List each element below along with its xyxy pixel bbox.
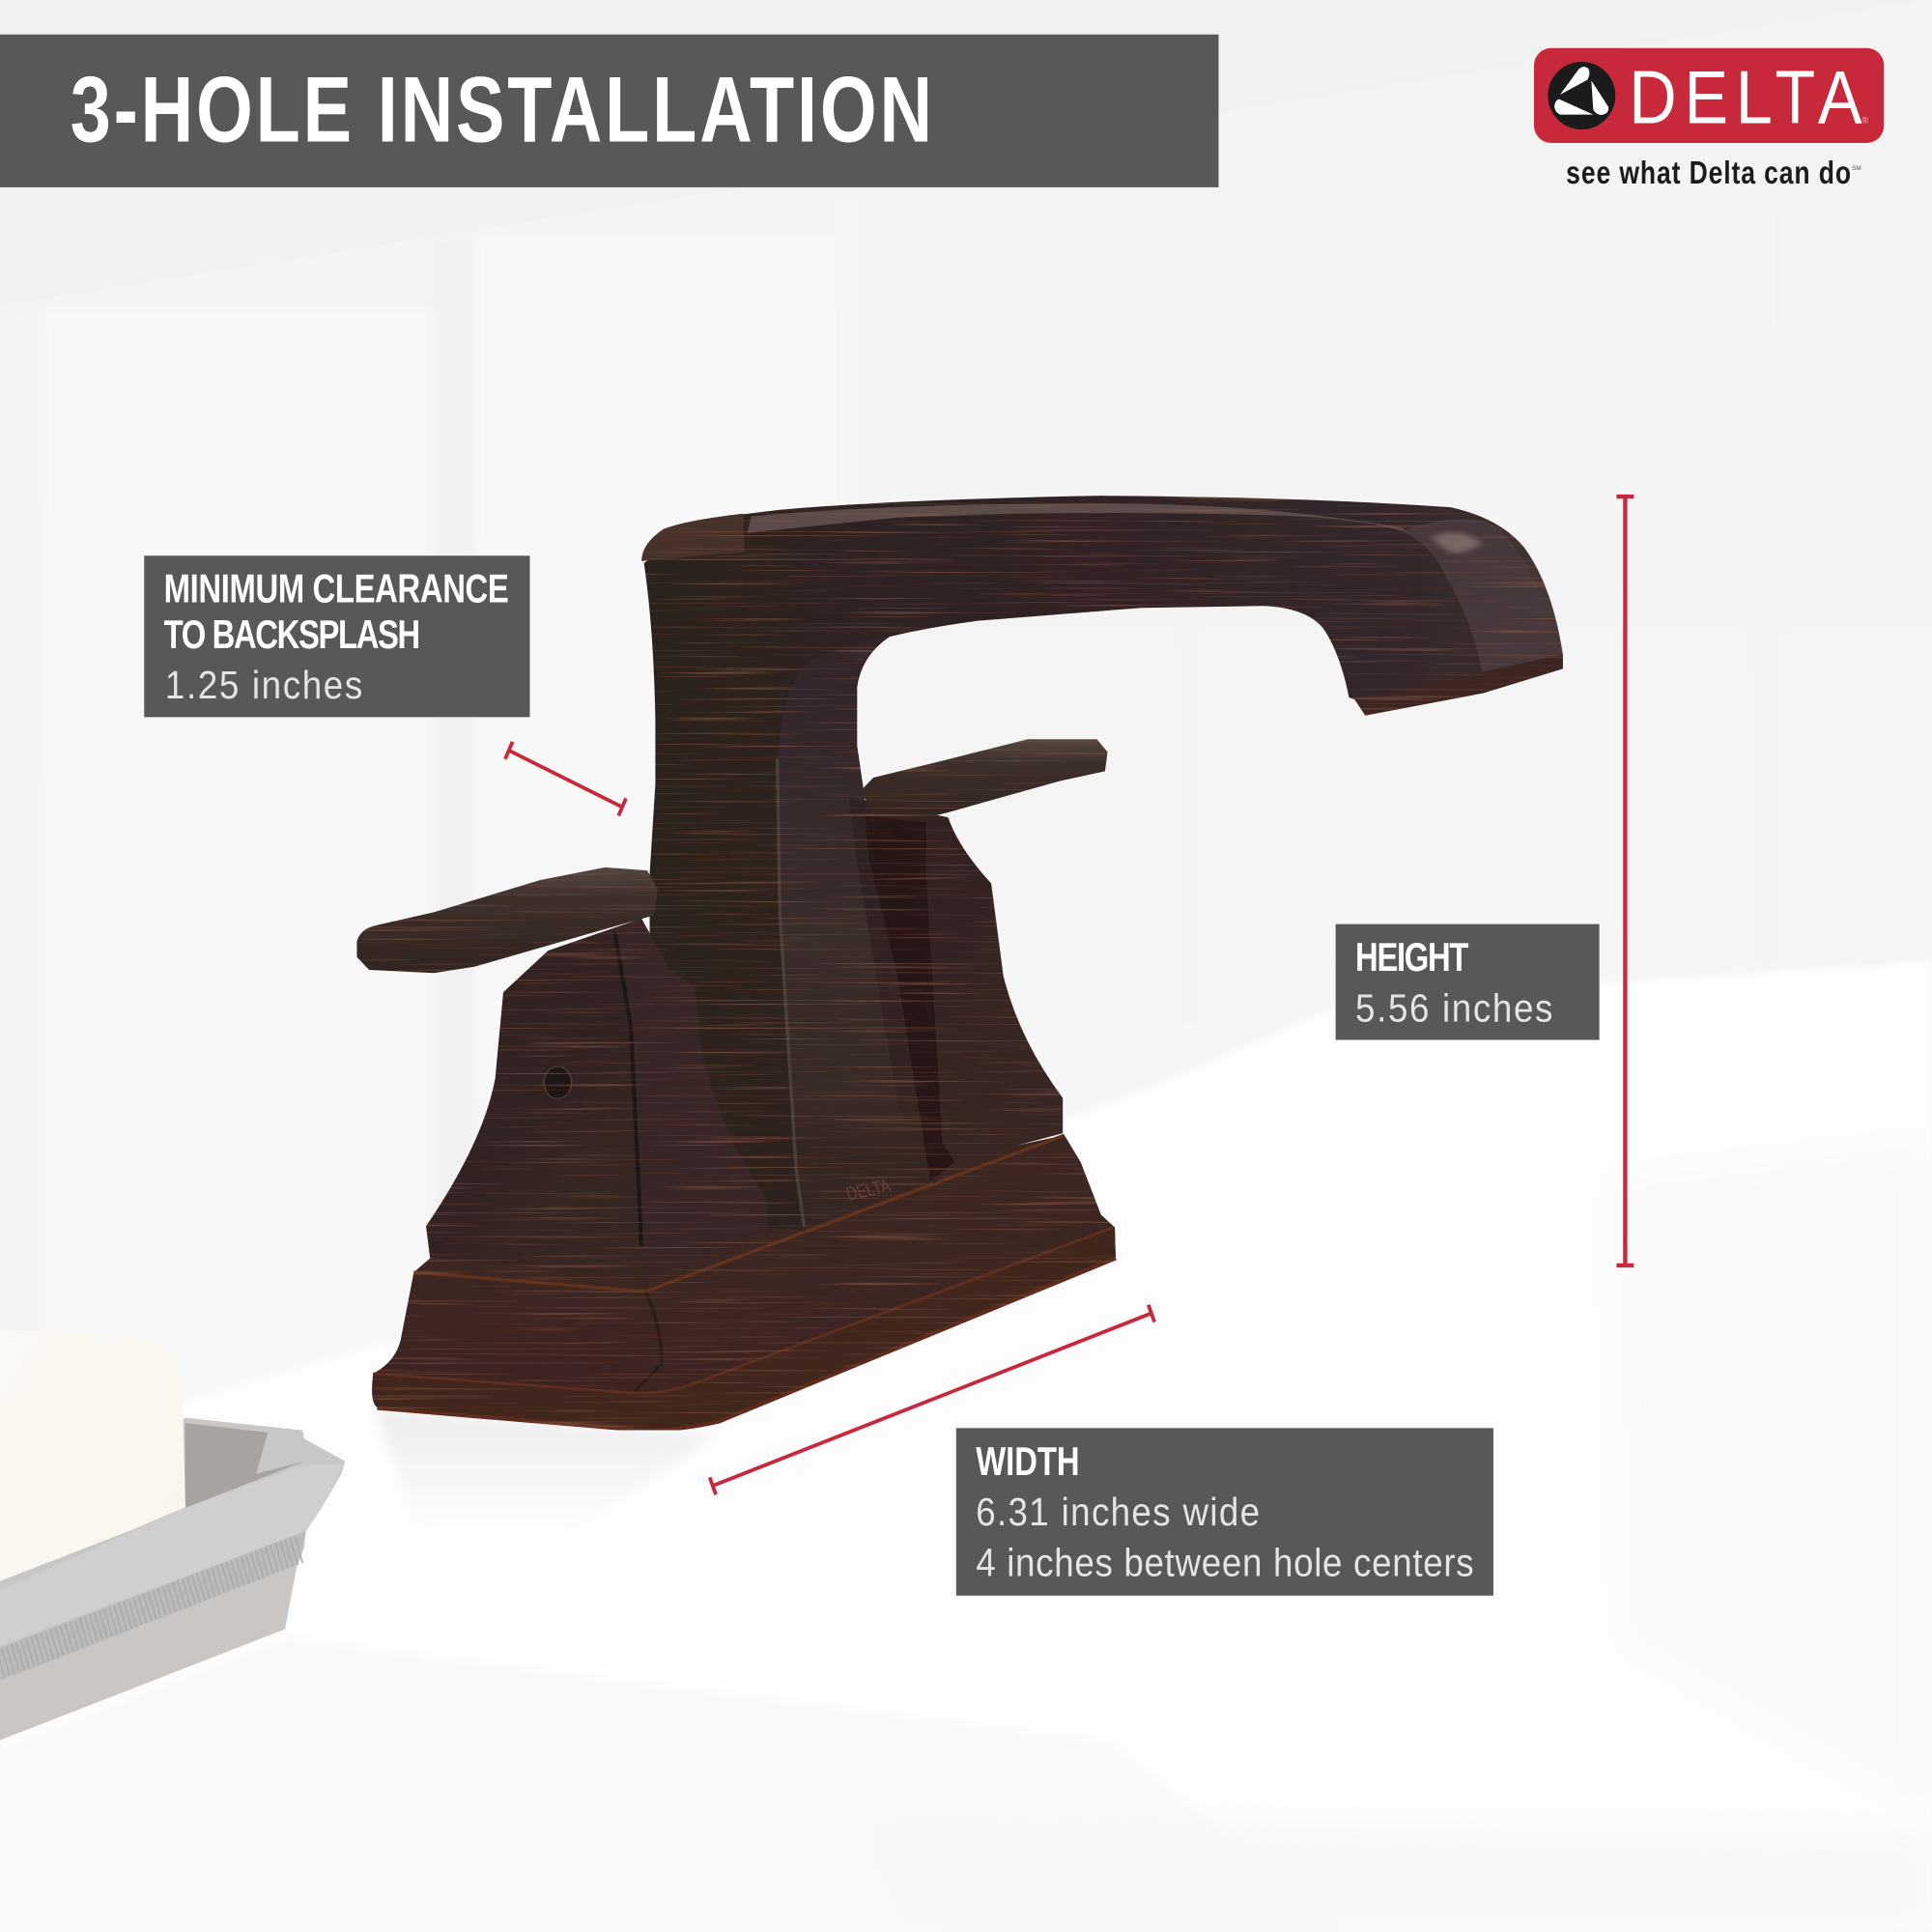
spout top highlight (748, 503, 1422, 539)
callout: minimum clearance: 1.25 inches (165, 664, 362, 708)
callout: height (1336, 924, 1600, 1040)
dish inner (185, 1423, 304, 1508)
callout: width (956, 1428, 1493, 1596)
basin (1614, 1146, 1932, 1811)
Delta logo (1534, 48, 1884, 191)
dish ribbed band (0, 1531, 306, 1681)
callout: width: WIDTH (976, 1438, 1080, 1484)
callout: minimum clearance: MINIMUM CLEARANCE (164, 566, 509, 611)
title bar (0, 35, 1218, 187)
spout end facet (1402, 519, 1563, 676)
dish upper band (0, 1464, 343, 1646)
rear handle (849, 739, 1107, 1184)
reflection beneath base (376, 1410, 715, 1528)
wall ledge at top (0, 0, 1922, 305)
top cap (641, 514, 745, 561)
soap and dish (0, 1330, 345, 1740)
soap bar (0, 1330, 185, 1581)
wordmark: DELTA (1629, 55, 1862, 140)
arrow: height dimension (1616, 496, 1634, 1266)
faucet (356, 496, 1563, 1430)
front column panel (778, 636, 928, 1228)
deck base plate (372, 1135, 1116, 1430)
countertop (0, 961, 1932, 1932)
tagline: see what Delta can do (1566, 156, 1851, 191)
callout: height: HEIGHT (1355, 934, 1468, 980)
callout: width: 6.31 inches wide (976, 1491, 1260, 1535)
arrow: width dimension (710, 1305, 1154, 1494)
dish rim (0, 1418, 345, 1740)
front handle (356, 867, 768, 1281)
screw hole (544, 1066, 572, 1098)
wall panel grooves (0, 74, 1775, 1432)
callout: minimum clearance: TO BACKSPLASH (164, 611, 420, 657)
callout: minimum clearance (144, 555, 529, 717)
title: 3-HOLE INSTALLATION (71, 58, 932, 162)
logo mark (1548, 62, 1615, 129)
Delta logo: SM (1852, 165, 1861, 172)
callout: width: 4 inches between hole centers (976, 1542, 1474, 1585)
callout: height: 5.56 inches (1355, 987, 1552, 1031)
DELTA mark on column: DELTA (843, 1174, 894, 1205)
Delta logo: ® (1861, 116, 1868, 126)
arrow: clearance dimension (505, 742, 626, 815)
dish lower band (0, 1569, 297, 1740)
spout and body (644, 496, 1563, 1233)
